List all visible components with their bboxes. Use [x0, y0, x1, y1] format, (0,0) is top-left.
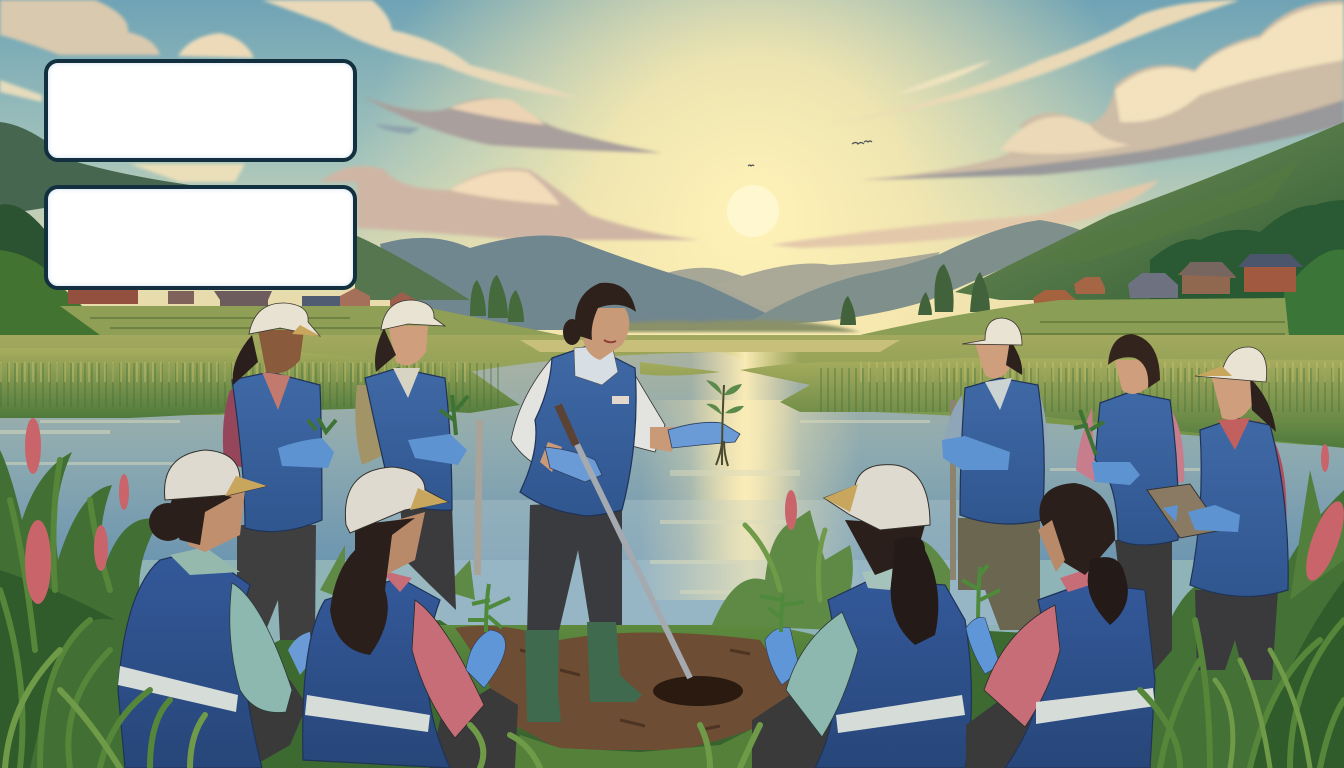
lake [0, 352, 1344, 625]
foreground base green [0, 620, 1344, 768]
person: seated woman front centre right [752, 465, 972, 768]
distant mountains [380, 220, 1085, 330]
person: standing woman far left [223, 303, 336, 640]
person: seated woman front second [303, 467, 518, 768]
planting hole [653, 676, 743, 706]
person: seated woman front left [118, 450, 312, 768]
birds [748, 141, 872, 166]
houses, right [1033, 254, 1303, 311]
clouds [0, 0, 1344, 248]
central reeds [320, 510, 950, 630]
ground and soil [440, 625, 830, 768]
text panel: lower white box [44, 185, 357, 290]
left hills [0, 122, 470, 340]
houses, left [68, 288, 416, 314]
right hill [955, 122, 1344, 345]
person: seated woman front right [966, 483, 1155, 768]
distant trees [470, 264, 990, 332]
seedling between seated women [962, 565, 1000, 625]
person: woman with clipboard [1147, 347, 1288, 680]
foreground grass blades [0, 460, 1344, 768]
person: hatless woman [1074, 334, 1184, 670]
person: centre instructor [511, 283, 744, 722]
reed banks [0, 348, 1344, 448]
tool handle beside second woman [474, 420, 483, 575]
sun [727, 185, 779, 237]
terraces and meadow [0, 298, 1344, 445]
person: standing woman right of lake [942, 318, 1047, 630]
text panel: upper white box [44, 59, 357, 162]
foreground right reeds [1120, 470, 1344, 768]
person: standing woman second left [355, 300, 468, 610]
foreground left water reeds [0, 450, 200, 768]
sky background [0, 0, 1344, 360]
red flower spikes [25, 418, 1344, 604]
